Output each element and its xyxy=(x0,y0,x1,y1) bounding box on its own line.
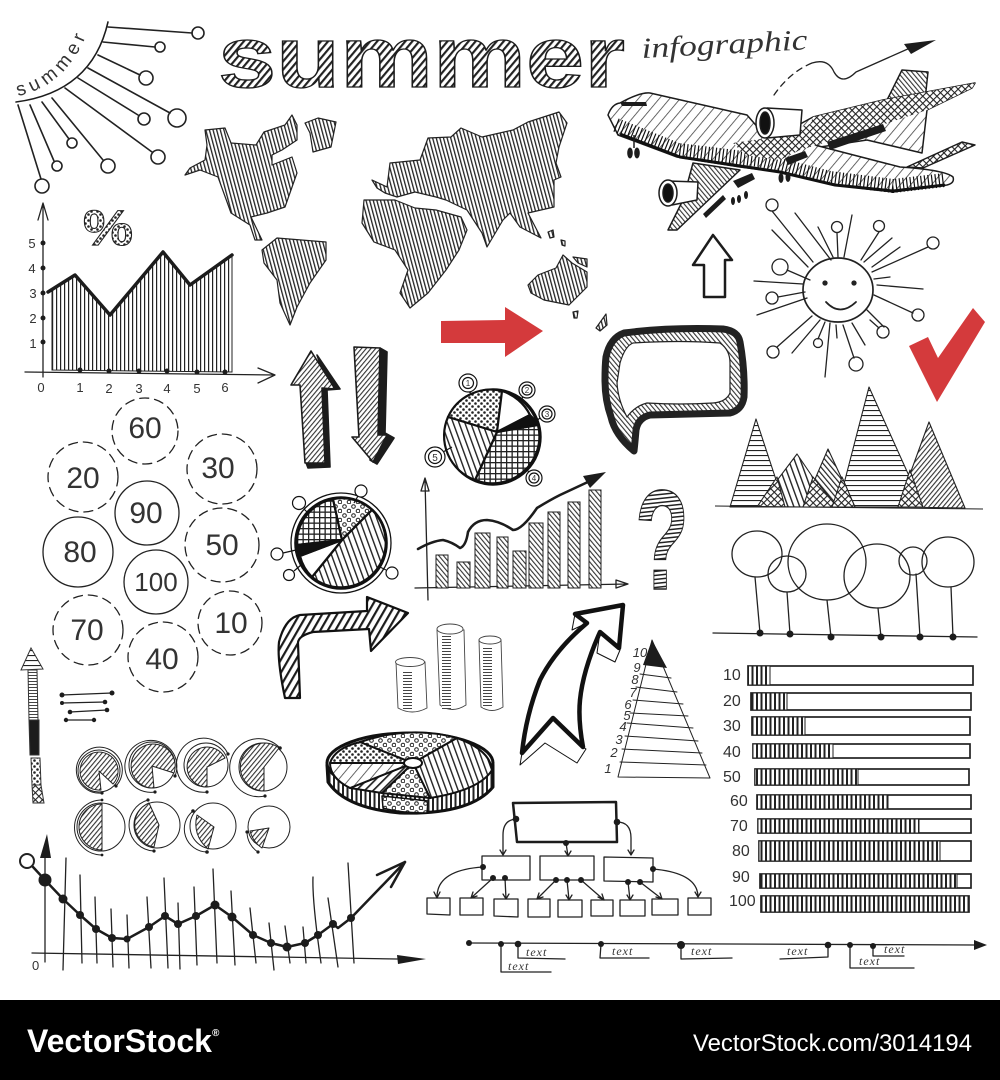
down arrow xyxy=(370,348,394,464)
up and down 3D arrows xyxy=(291,347,394,468)
engine lower xyxy=(668,181,698,205)
curved hatched arrow xyxy=(279,597,408,698)
subtitle: infographic xyxy=(641,24,808,65)
islands xyxy=(548,230,607,331)
flight path arrow xyxy=(774,40,936,95)
smiling sun xyxy=(754,199,939,377)
axis numbers: 0 xyxy=(37,380,45,395)
axis numbers: 1 xyxy=(76,380,84,395)
timeline labels: text xyxy=(787,944,808,958)
percent icon: % xyxy=(83,200,133,256)
sun word: summer xyxy=(16,33,84,96)
bar labels: 30 xyxy=(723,718,741,735)
footer bar xyxy=(0,1000,1000,1080)
bar labels: 70 xyxy=(730,818,748,835)
bar labels xyxy=(723,667,756,910)
pyramid numbers: 9 xyxy=(633,660,641,675)
timeline labels xyxy=(508,942,905,973)
flow diagram xyxy=(427,802,711,917)
bar labels: 40 xyxy=(723,744,741,761)
far wing xyxy=(780,83,975,153)
small line legend xyxy=(60,690,114,722)
question mark: ? xyxy=(635,461,689,620)
cylinders xyxy=(396,624,503,712)
triangle mountains chart xyxy=(715,387,983,509)
rising curve xyxy=(418,481,590,549)
pyramid numbers: 3 xyxy=(615,732,623,747)
pyramid numbers: 8 xyxy=(631,672,639,687)
bar labels: 80 xyxy=(732,843,750,860)
north america xyxy=(185,115,297,240)
axis numbers: 5 xyxy=(28,236,36,251)
timeline labels: text xyxy=(526,945,547,959)
pie arcs and dots xyxy=(74,738,282,856)
axis numbers: 4 xyxy=(163,381,171,396)
callout digits: 5 xyxy=(432,453,438,464)
axis numbers: 2 xyxy=(29,311,37,326)
callout digits: 2 xyxy=(525,386,530,395)
red arrow xyxy=(441,307,543,357)
small pie set xyxy=(74,738,290,856)
number circles: 60 xyxy=(128,412,162,445)
tail fin xyxy=(887,70,928,100)
axis numbers: 3 xyxy=(135,381,143,396)
title: summer xyxy=(218,9,625,106)
bar labels: 60 xyxy=(730,793,748,810)
callout digits: 4 xyxy=(532,474,537,483)
number circles: 40 xyxy=(145,643,179,676)
up arrow outline xyxy=(693,235,732,297)
pyramid numbers: 5 xyxy=(623,708,631,723)
flaps and wheels xyxy=(620,102,886,218)
near wing xyxy=(668,163,740,230)
bottom line chart xyxy=(20,834,426,973)
callout circles xyxy=(425,374,555,486)
brand: VectorStock xyxy=(27,1023,212,1059)
stabilizer xyxy=(907,142,975,168)
axis numbers: 6 xyxy=(221,380,229,395)
bubble tree chart xyxy=(713,524,977,640)
zero label: 0 xyxy=(32,958,39,973)
timeline labels: text xyxy=(884,942,905,956)
wing root shading xyxy=(733,123,867,160)
pyramid numbers: 2 xyxy=(609,745,618,760)
pyramid numbers xyxy=(604,645,648,776)
red check mark xyxy=(909,308,985,402)
timeline xyxy=(466,940,987,973)
trend line xyxy=(48,252,232,315)
axis numbers: 5 xyxy=(193,381,201,396)
number circles: 10 xyxy=(214,607,248,640)
timeline labels: text xyxy=(691,944,712,958)
big curved 3D arrow xyxy=(520,605,623,765)
bar chart with rising curve xyxy=(415,472,628,600)
eurasia xyxy=(372,112,567,247)
axis numbers: 4 xyxy=(28,261,36,276)
belly shading xyxy=(616,125,945,186)
numbered pyramid xyxy=(604,640,710,778)
timeline labels: text xyxy=(859,954,880,968)
up arrow xyxy=(305,355,340,468)
small vertical arrow xyxy=(21,648,44,803)
axis numbers: 3 xyxy=(29,286,37,301)
engine upper xyxy=(767,108,802,138)
axis numbers: 2 xyxy=(105,381,113,396)
number circles: 20 xyxy=(66,462,100,495)
airplane xyxy=(608,70,975,230)
line chart with area xyxy=(25,203,275,396)
bar labels: 100 xyxy=(729,893,756,910)
bar labels: 90 xyxy=(732,869,750,886)
number circles: 70 xyxy=(70,614,104,647)
bar labels: 10 xyxy=(723,667,741,684)
number circles: 90 xyxy=(129,497,163,530)
bar labels: 50 xyxy=(723,769,741,786)
axis numbers xyxy=(28,236,229,396)
number circles xyxy=(43,398,262,692)
south america xyxy=(262,238,326,325)
pyramid numbers: 4 xyxy=(619,719,627,734)
number circles: 50 xyxy=(205,529,239,562)
fuselage xyxy=(608,93,953,192)
pyramid numbers: 1 xyxy=(604,761,612,776)
area xyxy=(52,252,232,372)
ringed pie chart xyxy=(271,485,398,593)
axes xyxy=(25,203,275,383)
url: VectorStock.com/3014194 xyxy=(693,1030,972,1057)
timeline labels: text xyxy=(612,944,633,958)
timeline labels: text xyxy=(508,959,529,973)
top-left sun with rays xyxy=(15,21,205,194)
world map xyxy=(185,112,607,331)
callout digits: 1 xyxy=(466,379,471,388)
pyramid numbers: 6 xyxy=(624,697,632,712)
callout digits xyxy=(432,379,550,483)
pie chart with callouts xyxy=(425,374,555,486)
greenland xyxy=(305,118,336,152)
axis numbers: 1 xyxy=(29,336,37,351)
number circles: 30 xyxy=(201,452,235,485)
australia xyxy=(528,255,587,305)
africa xyxy=(362,200,467,308)
bar labels: 20 xyxy=(723,693,741,710)
pyramid numbers: 10 xyxy=(633,645,648,660)
speech bubble xyxy=(605,328,744,451)
number circles: 80 xyxy=(63,536,97,569)
pyramid numbers: 7 xyxy=(629,685,637,700)
3D pie chart xyxy=(327,732,493,813)
callout digits: 3 xyxy=(545,410,550,419)
progress bars xyxy=(748,666,973,912)
number circles: 100 xyxy=(134,567,178,597)
brand: ® xyxy=(212,1028,220,1039)
